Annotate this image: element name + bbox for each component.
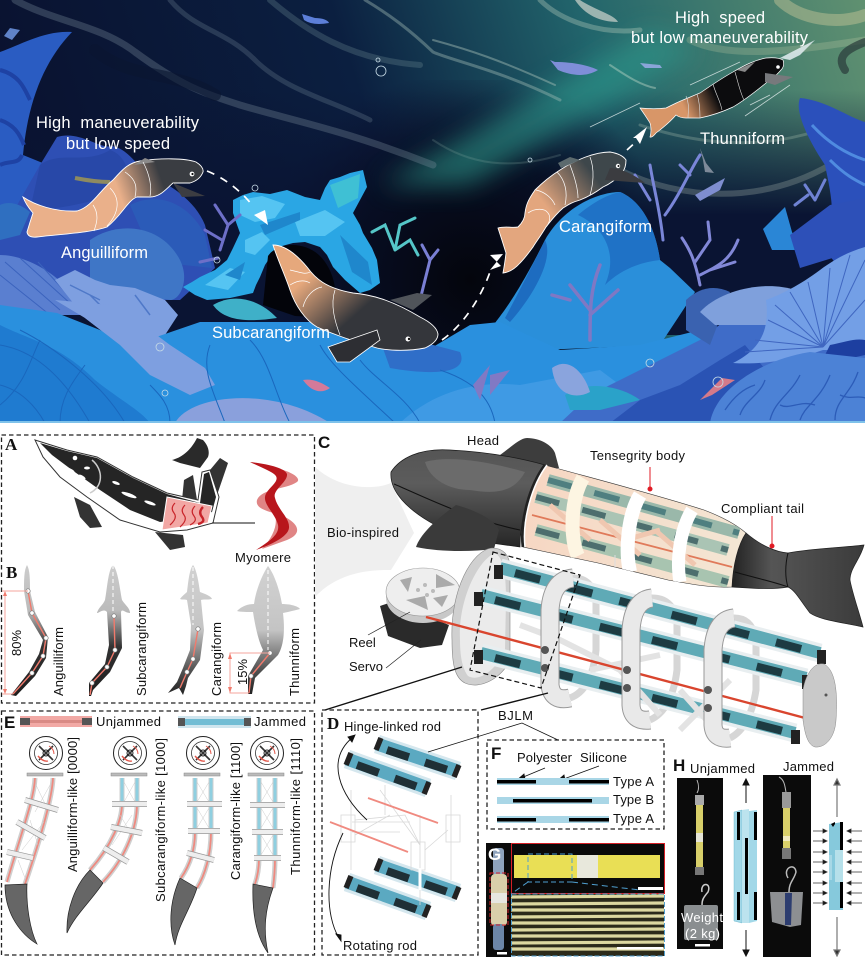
left fan coral (0, 255, 85, 315)
panel letter A: A (5, 435, 18, 454)
label Head: Head (467, 433, 499, 448)
brain coral (90, 228, 184, 300)
periwinkle rocks (55, 270, 178, 336)
left large fin (0, 32, 72, 205)
label 2 kg: (2 kg) (685, 926, 720, 941)
label Compliant tail: Compliant tail (721, 501, 804, 516)
panel letter E: E (4, 713, 15, 732)
panel letter B: B (6, 563, 17, 582)
bottom reef fields (0, 305, 720, 423)
branching corals (198, 153, 826, 294)
water ripples (15, 0, 865, 194)
skeleton linkage (341, 785, 460, 905)
label BJLM: BJLM (498, 708, 533, 723)
panel letter G: G (488, 845, 501, 864)
teal rods (481, 568, 820, 735)
red tendon (426, 617, 820, 722)
arrows: jammed tension (834, 779, 840, 956)
bubbles (156, 58, 723, 396)
thin fish (700, 148, 714, 173)
diagram: jammed layers (829, 822, 843, 910)
label Polyester: Polyester (517, 750, 573, 765)
right rock field (562, 325, 865, 421)
robotic fish cutaway (391, 438, 864, 627)
label Type B: Type B (613, 792, 654, 807)
pike fish illustration (35, 438, 228, 550)
label Carangiform-like: Carangiform-like [1100] (228, 742, 243, 880)
label Subcarangiform: Subcarangiform (134, 602, 149, 696)
front plate (452, 548, 510, 685)
arrow: bio-inspired (315, 467, 414, 597)
tail model: Anguilliform-like (5, 736, 63, 944)
label: Subcarangiform: Subcarangiform (212, 324, 330, 342)
label Weight: Weight (681, 910, 723, 925)
servo (380, 602, 449, 648)
legend label Unjammed: Unjammed (96, 714, 161, 729)
light beam (380, 30, 700, 185)
dashed zoom rectangle (470, 552, 580, 688)
tail model: Thunniform-like (248, 736, 285, 953)
ring back arcs (570, 578, 756, 738)
callout pin: tensegrity (648, 467, 652, 491)
label Bio-inspired: Bio-inspired (327, 525, 399, 540)
label Reel: Reel (349, 635, 376, 650)
label Thunniform-like: Thunniform-like [1110] (288, 738, 303, 875)
label 15%: 15% (235, 659, 250, 685)
label Jammed: Jammed (783, 759, 834, 774)
label Type A: Type A (613, 774, 654, 789)
layup type A top (497, 778, 609, 785)
photo: unjammed strip with weight (677, 778, 723, 949)
trail arrows (207, 138, 640, 340)
leader lines BJLM (428, 723, 558, 752)
legend: jammed rod (178, 716, 251, 728)
arrows: compression left (813, 829, 827, 905)
panel E frame (2, 711, 314, 955)
brain coral right (710, 352, 865, 423)
label Hinge-linked rod: Hinge-linked rod (344, 719, 441, 734)
panel letter F: F (491, 744, 501, 763)
label Unjammed: Unjammed (690, 761, 755, 776)
tail model: Subcarangiform-like (67, 736, 147, 933)
robot fish: Subcarangiform (273, 245, 438, 362)
robot skeleton assembly (325, 548, 837, 747)
label: Carangiform: Carangiform (559, 218, 652, 236)
label: Thunniform: Thunniform (700, 130, 785, 148)
arrows: unjammed tension (743, 779, 749, 956)
label Tensegrity body: Tensegrity body (590, 448, 686, 463)
swim mode: Anguilliform silhouette (2, 565, 48, 696)
label Rotating rod: Rotating rod (343, 938, 417, 953)
label Carangiform: Carangiform (209, 622, 224, 696)
layup type B (497, 797, 609, 804)
left coral mound (0, 136, 215, 300)
panel letter D: D (327, 714, 339, 733)
leader Reel (368, 612, 410, 635)
label Anguilliform: Anguilliform (51, 627, 66, 696)
tail model: Carangiform-like (171, 736, 222, 945)
label Thunniform: Thunniform (287, 628, 302, 696)
label Anguilliform-like: Anguilliform-like [0000] (65, 737, 80, 872)
scene caption: high maneuverability: High maneuverability (36, 114, 200, 132)
label Myomere: Myomere (235, 550, 291, 565)
robot fish: Anguilliform (23, 158, 205, 237)
central blue mound (480, 192, 695, 350)
label Servo: Servo (349, 659, 383, 674)
scene caption: low maneuverability: but low maneuverability (631, 29, 809, 47)
leader Servo (386, 640, 421, 668)
layup type A bottom (497, 816, 609, 823)
end plate (803, 664, 837, 747)
arrow: hinge-linked (338, 735, 367, 820)
robot fish: Carangiform (498, 152, 645, 273)
panel D frame (322, 710, 478, 955)
small reef corals (565, 386, 640, 410)
robot fish: Thunniform (640, 58, 793, 137)
panel A and B frame (2, 435, 314, 703)
arch opening (263, 245, 336, 318)
BJLM rods exploded (346, 743, 459, 912)
callout pin: tail (770, 516, 774, 548)
small fish top (302, 14, 662, 75)
arch of coral (183, 170, 380, 300)
label Silicone: Silicone (580, 750, 627, 765)
right large fin (798, 98, 865, 261)
myomere icon (250, 462, 298, 550)
swim mode: Subcarangiform silhouette (89, 565, 130, 696)
panel F frame (487, 740, 664, 829)
leader lines to D and F (325, 667, 548, 710)
fan coral right (733, 247, 865, 363)
ring front arcs (550, 578, 734, 738)
label: Anguilliform: Anguilliform (61, 244, 148, 262)
legend: unjammed rod (20, 716, 92, 727)
scene caption: low speed: but low speed (66, 135, 170, 153)
label 80%: 80% (9, 630, 24, 656)
panel: underwater scene (0, 0, 865, 423)
reel (386, 568, 460, 623)
scene caption: high speed: High speed (675, 9, 765, 27)
panel letter C: C (318, 433, 330, 452)
diagram: unjammed layers (734, 809, 757, 923)
label Type A: Type A (613, 811, 654, 826)
photo: jammed strip with weight (763, 775, 811, 957)
arrows: compression right (847, 829, 862, 905)
arrow: rotating (329, 833, 343, 941)
label Subcarangiform-like: Subcarangiform-like [1000] (153, 738, 168, 902)
swim mode: Carangiform silhouette (168, 565, 212, 695)
arrows polyester and silicone (517, 766, 599, 781)
panel letter H: H (673, 756, 685, 775)
panel G photos (486, 843, 664, 957)
swim mode: Thunniform silhouette (228, 566, 300, 694)
legend label Jammed: Jammed (254, 714, 306, 729)
